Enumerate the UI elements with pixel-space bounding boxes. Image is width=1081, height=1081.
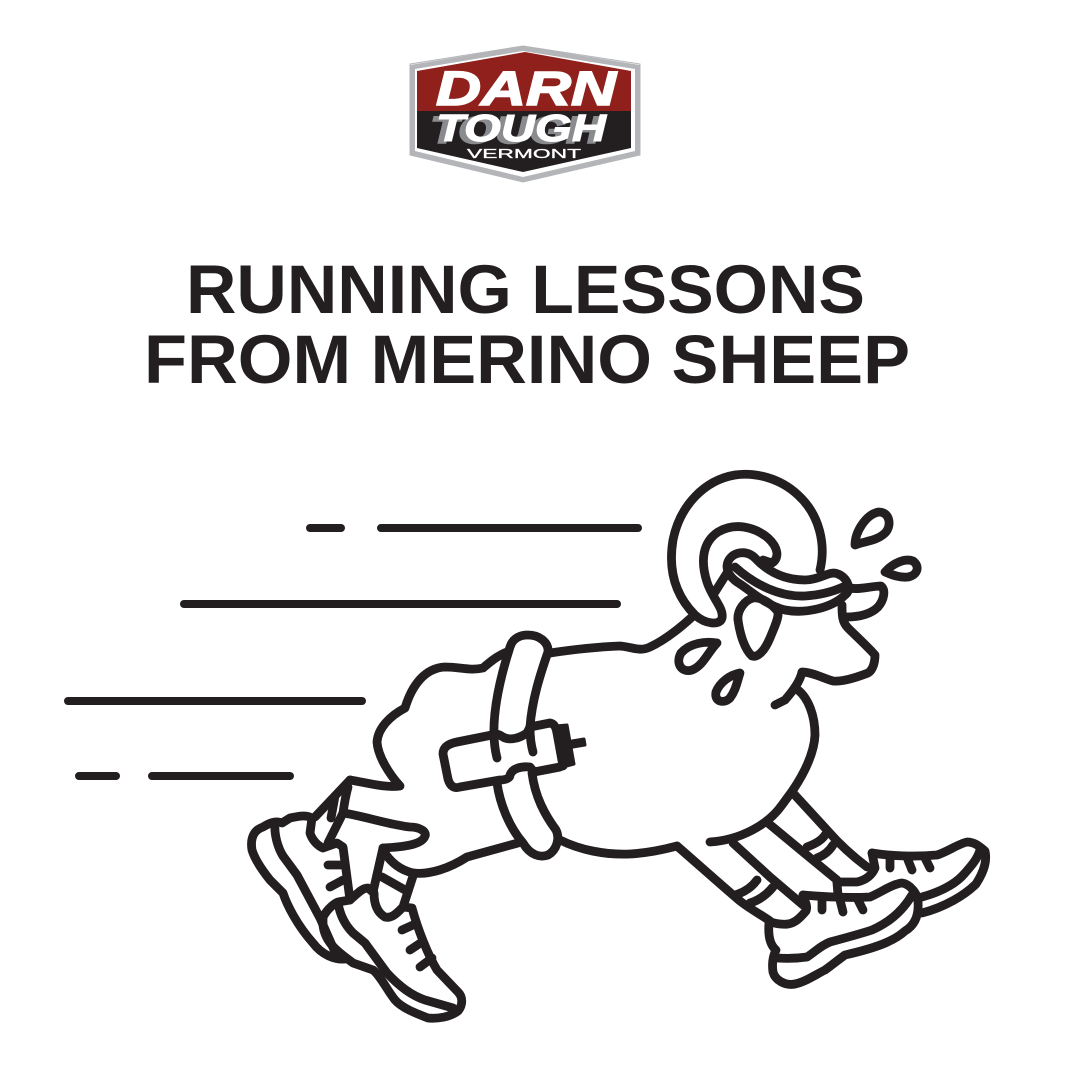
title — [144, 251, 910, 398]
sweat drops — [679, 512, 917, 701]
water bottle — [443, 723, 585, 788]
logo: Darn Tough Vermont badge: TOUGH — [436, 108, 608, 150]
sheep body outline — [350, 617, 793, 921]
logo: Darn Tough Vermont badge: VERMONT — [467, 146, 581, 161]
front legs and shoes — [733, 793, 986, 984]
speed lines — [68, 528, 638, 776]
running merino sheep illustration — [251, 474, 986, 1018]
logo: Darn Tough Vermont badge: TOUGH — [430, 110, 602, 152]
rear legs and shoes — [251, 780, 518, 1018]
logo: Darn Tough Vermont badge — [410, 46, 640, 182]
title: FROM MERINO SHEEP — [144, 321, 910, 398]
belt — [494, 635, 558, 856]
title: RUNNING LESSONS — [186, 251, 865, 328]
logo: Darn Tough Vermont badge: DARN — [436, 63, 618, 116]
sheep head with horn — [671, 474, 884, 790]
